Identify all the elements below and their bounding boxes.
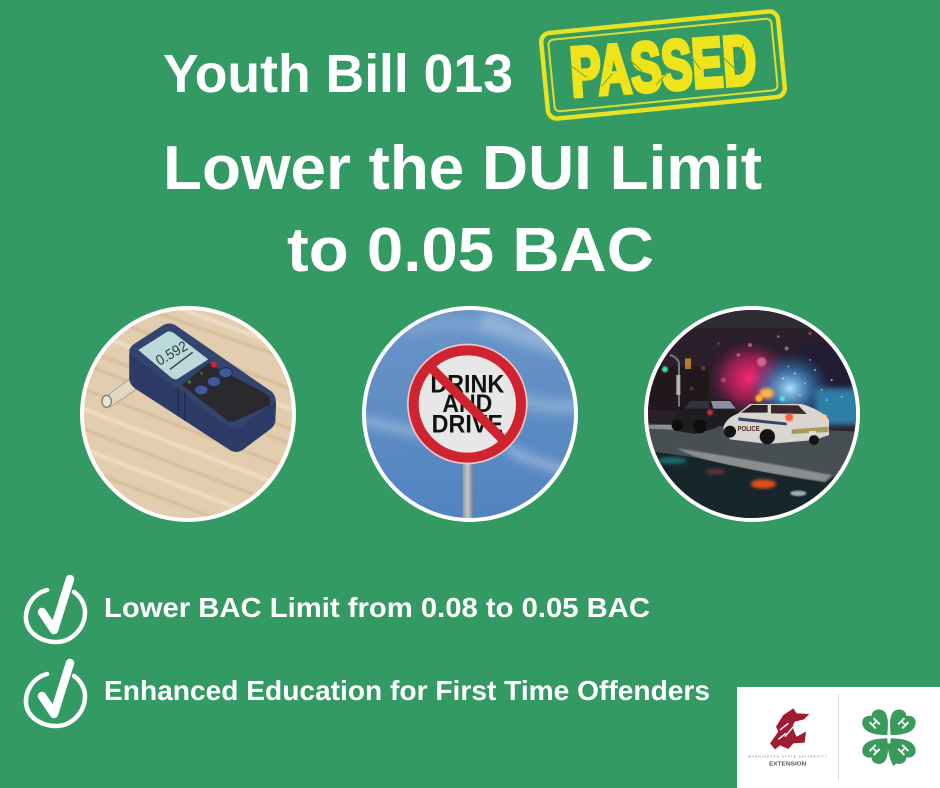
bullet 1: check icon: [26, 579, 85, 642]
logo: WSU cougar: [770, 708, 809, 749]
bullet 1: text: Lower BAC Limit from 0.08 to 0.05 BAC: [104, 592, 650, 623]
traffic light: [662, 355, 691, 407]
stamp: PASSED: [540, 11, 786, 119]
police car: [723, 404, 829, 445]
dark suv: [672, 399, 737, 434]
snow: [690, 332, 812, 390]
photo: police car at night: [642, 305, 862, 527]
road: [648, 424, 854, 518]
prohibition sign: DRIVE: [432, 412, 503, 439]
logo panel: [737, 687, 940, 788]
breathalyzer device: [102, 324, 276, 452]
logo text: Washington State University Extension: [748, 755, 827, 767]
title: Youth Bill 013: Youth Bill 013: [163, 44, 513, 104]
heading: to 0.05 BAC: to 0.05 BAC: [287, 216, 654, 285]
logo text: Washington State University Extension: WASHINGTON STATE UNIVERSITY: [748, 755, 827, 759]
photo: breathalyzer on wood: [80, 306, 296, 522]
logo: 4-H clover: H: [895, 742, 912, 758]
stamp: PASSED: PASSED: [568, 21, 759, 111]
logo: 4-H clover: [862, 709, 916, 766]
breathalyzer device: 0.592: [153, 339, 191, 369]
bullet 2: text: Enhanced Education for First Time Offenders: [104, 675, 710, 706]
logo: 4-H clover: H: [866, 742, 883, 758]
prohibition sign: DRINK: [430, 371, 504, 398]
heading: Lower the DUI Limit: Lower the DUI Limit: [163, 134, 762, 203]
logo: 4-H clover: H: [867, 715, 883, 732]
prohibition sign: AND: [442, 391, 492, 418]
logo text: Washington State University Extension: EXTENSION: [769, 761, 807, 767]
prohibition sign: [407, 344, 528, 464]
logo: 4-H clover: H: [895, 715, 911, 732]
bullet 2: check icon: [26, 663, 85, 726]
photo: no drink and drive sign: [360, 306, 590, 522]
sign post: [463, 463, 473, 520]
police car: POLICE: [738, 426, 760, 433]
